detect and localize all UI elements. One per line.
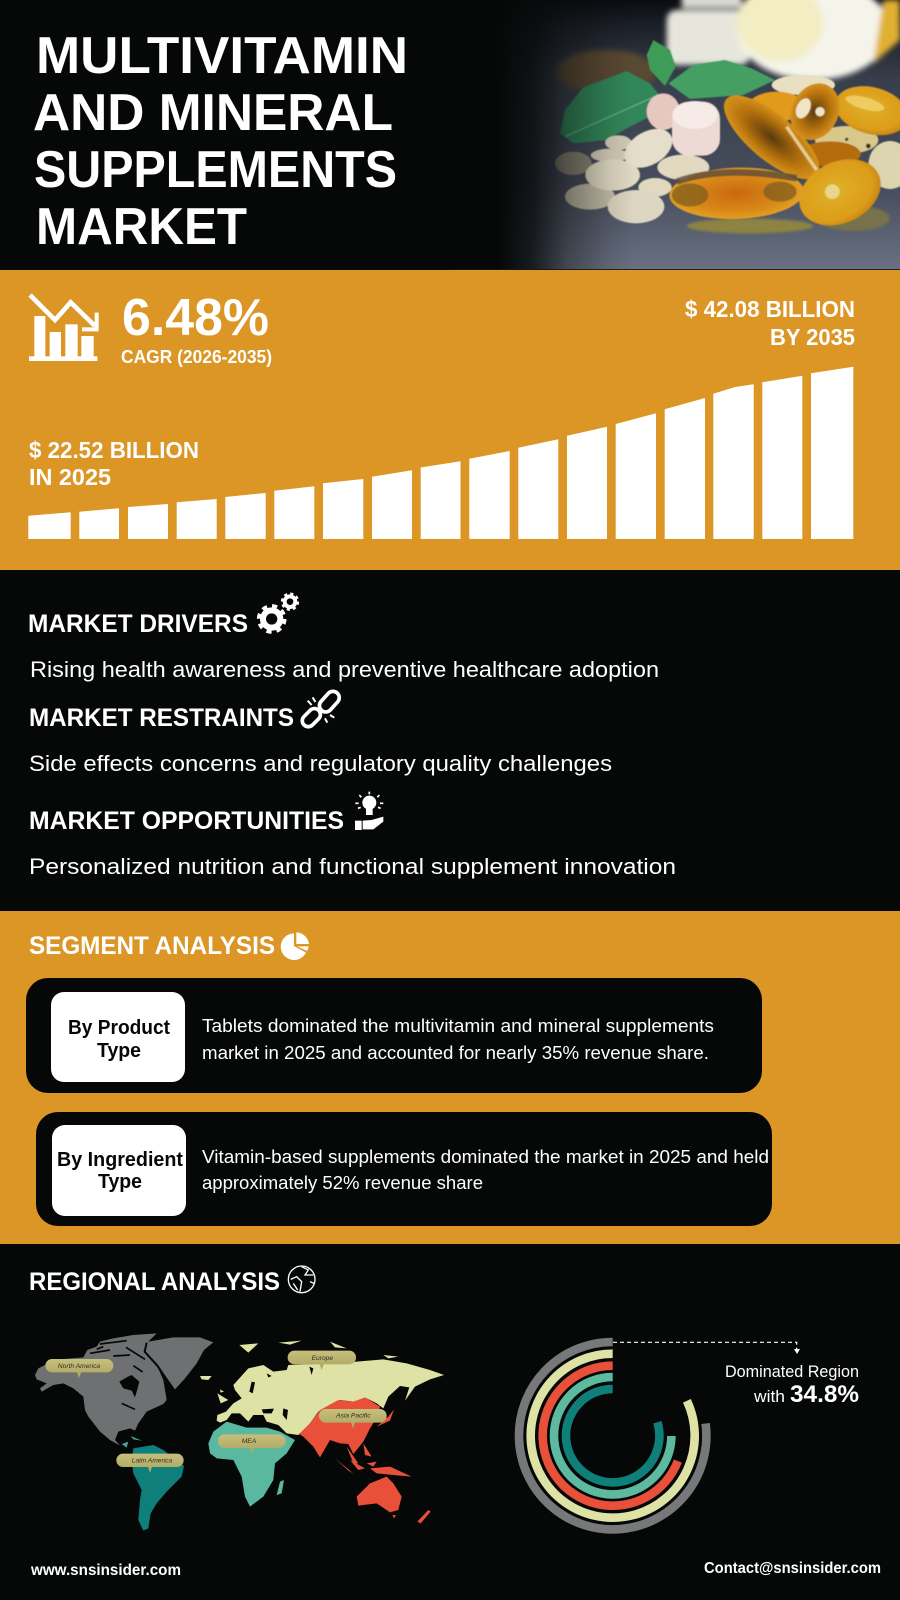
opportunity text: Personalized nutrition and functional supplement innovation: [29, 854, 676, 879]
card: by ingredient type: By Ingredient: [57, 1149, 183, 1171]
region: north america: [35, 1333, 213, 1446]
contact email: Contact@snsinsider.com: [704, 1560, 881, 1577]
callout: dominated region: Dominated Region: [725, 1362, 859, 1381]
restraint text: Side effects concerns and regulatory quality challenges: [29, 751, 612, 776]
heading: regional analysis: REGIONAL ANALYSIS: [29, 1268, 280, 1296]
2025 value: $ 22.52 BILLION: [29, 437, 199, 463]
title: [33, 27, 408, 256]
label: europe: Europe: [312, 1355, 333, 1362]
dashed leader arrow: [613, 1342, 800, 1354]
footer: [30, 1560, 881, 1579]
label: middle east and africa: MEA: [242, 1438, 257, 1445]
card: by ingredient type: Vitamin-based supplements dominated the market in 2025 and held: [202, 1146, 769, 1167]
panel: regional analysis: [29, 1266, 859, 1531]
label: north america: [45, 1359, 113, 1378]
heading: market drivers: MARKET DRIVERS: [28, 610, 248, 638]
radial bar chart: [519, 1342, 706, 1529]
label: north america: North America: [58, 1363, 100, 1370]
card: by ingredient type: approximately 52% revenue share: [202, 1172, 483, 1193]
heading: market restraints: MARKET RESTRAINTS: [29, 704, 294, 732]
panel: market size: [0, 270, 900, 570]
card: by product type: market in 2025 and accounted for nearly 35% revenue share.: [202, 1042, 709, 1063]
label: latin america: Latin America: [132, 1458, 173, 1465]
label: europe: [288, 1351, 356, 1370]
2025 value: [29, 437, 199, 490]
title: MARKET: [36, 198, 247, 256]
icon: idea hand: [355, 792, 383, 830]
driver text: Rising health awareness and preventive healthcare adoption: [30, 657, 659, 682]
panel: market dynamics: [28, 594, 676, 879]
title: AND MINERAL: [33, 84, 393, 142]
callout: dominated region: 34.8%: [790, 1381, 859, 1408]
website: www.snsinsider.com: [30, 1562, 181, 1579]
bar chart: [28, 367, 853, 539]
heading: market opportunities: MARKET OPPORTUNITIES: [29, 807, 344, 835]
label: latin america: [116, 1454, 184, 1473]
icon: gears: [259, 594, 298, 632]
label: asia pacific: [319, 1409, 387, 1429]
CAGR label: CAGR (2026-2035): [121, 347, 272, 367]
heading: segment analysis: SEGMENT ANALYSIS: [29, 932, 275, 960]
icon: growth chart: [29, 295, 97, 361]
icon: globe: [288, 1266, 315, 1293]
2035 value: BY 2035: [770, 324, 855, 350]
panel: segment analysis: [0, 911, 900, 1244]
2025 value: IN 2025: [29, 464, 111, 490]
card: by product type: [26, 978, 762, 1093]
title: MULTIVITAMIN: [36, 27, 408, 85]
card: by product type: By Product: [68, 1017, 170, 1039]
world map: [35, 1333, 444, 1531]
title: SUPPLEMENTS: [34, 141, 397, 199]
callout: dominated region: [725, 1362, 859, 1408]
region: europe: [200, 1341, 444, 1435]
card: by product type: Tablets dominated the multivitamin and mineral supplements: [202, 1015, 714, 1036]
region: latin america: [122, 1436, 184, 1531]
icon: pie chart: [281, 932, 309, 960]
label: middle east and africa: [218, 1434, 286, 1454]
card: by product type: Type: [97, 1040, 141, 1062]
callout: dominated region: with: [753, 1387, 785, 1406]
region: middle east and africa: [208, 1422, 295, 1507]
card: by ingredient type: [36, 1112, 772, 1226]
label: asia pacific: Asia Pacific: [335, 1413, 371, 1420]
CAGR figure: 6.48%: [122, 289, 269, 347]
card: by ingredient type: Type: [98, 1171, 142, 1193]
2035 value: [685, 296, 855, 350]
icon: broken chain: [300, 689, 342, 729]
region: asia pacific: [299, 1397, 431, 1523]
header photo: pills and softgels: [450, 0, 900, 269]
2035 value: $ 42.08 BILLION: [685, 296, 855, 322]
